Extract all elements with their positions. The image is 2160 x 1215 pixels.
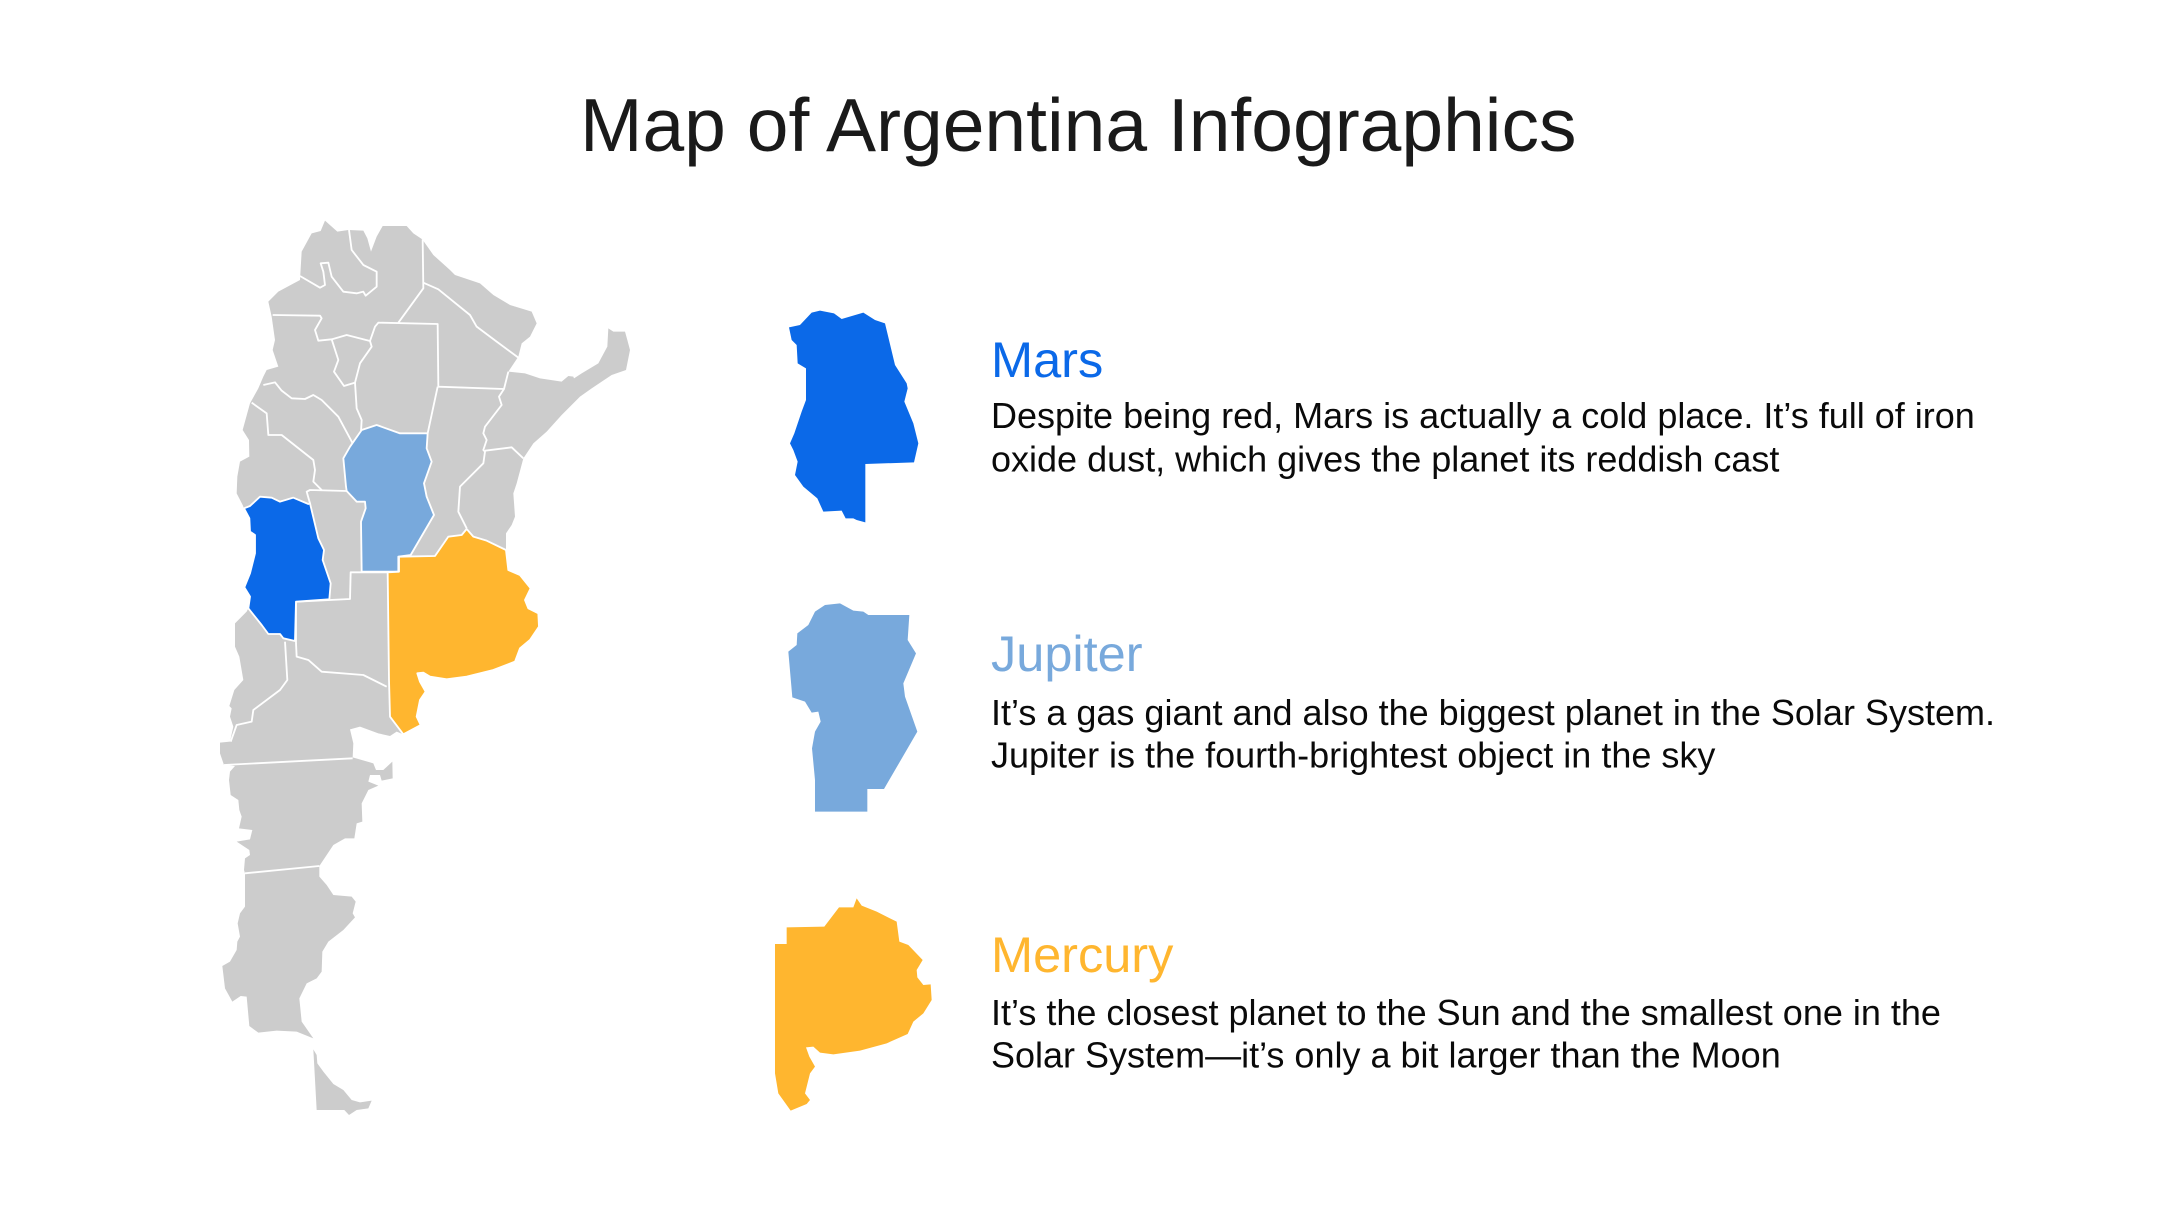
map: province borders [224, 230, 523, 873]
map of Argentina [220, 221, 630, 1115]
map: Buenos Aires province (Mercury) [388, 529, 539, 734]
text: Mercury description: It’s the closest planet to the Sun and the smallest one in the [991, 992, 1941, 1033]
text: Jupiter description: Jupiter is the fourth-brightest object in the sky [991, 734, 1715, 776]
text: Jupiter description [991, 692, 1995, 776]
text: Mercury description [991, 992, 1941, 1076]
map: grey country silhouette [220, 221, 630, 1115]
heading: Jupiter: Jupiter [991, 625, 1143, 682]
panel: Mars [789, 311, 1975, 522]
text: Mercury description: Solar System—it’s only a bit larger than the Moon [991, 1034, 1781, 1076]
icon: Buenos Aires shape [775, 898, 932, 1111]
text: Mars description: oxide dust, which gives the planet its reddish cast [991, 438, 1779, 480]
text: Mars description: Despite being red, Mars is actually a cold place. It’s full of iron [991, 395, 1975, 436]
icon: Mendoza shape [789, 311, 918, 522]
panel: Mercury [775, 898, 1941, 1111]
heading: Mars: Mars [991, 331, 1103, 388]
icon: Cordoba shape [788, 603, 917, 812]
heading: Mercury: Mercury [991, 926, 1174, 983]
map: Cordoba province (Jupiter) [343, 425, 434, 572]
panel: Jupiter [788, 603, 1995, 812]
title: Map of Argentina Infographics [580, 83, 1576, 167]
text: Jupiter description: It’s a gas giant and also the biggest planet in the Solar System. [991, 692, 1995, 733]
text: Mars description [991, 395, 1975, 480]
map: Mendoza province (Mars) [244, 497, 331, 641]
